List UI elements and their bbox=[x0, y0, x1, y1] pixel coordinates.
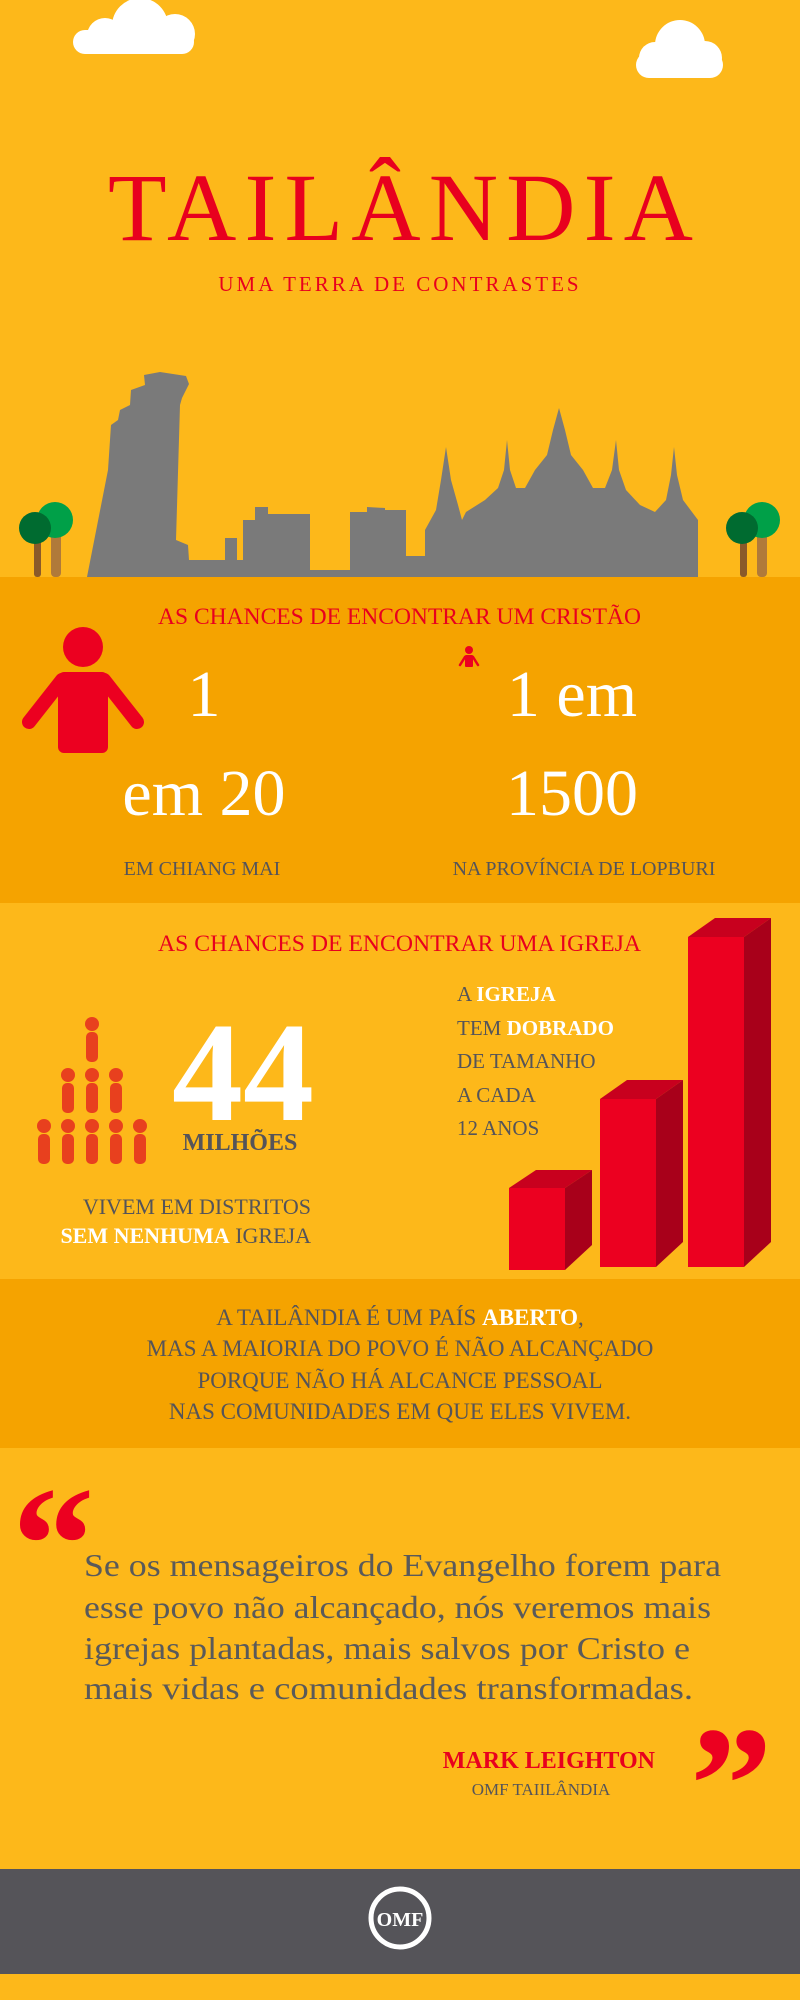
stat: 1 em 1500: 1 em bbox=[507, 658, 637, 731]
footer bbox=[0, 1869, 800, 1974]
trees right bbox=[726, 502, 780, 577]
text: church doubled: TEM DOBRADO bbox=[457, 1016, 614, 1040]
icon: big person bbox=[29, 627, 137, 753]
author: MARK LEIGHTON bbox=[443, 1748, 656, 1774]
icon: open quote: “ bbox=[12, 1453, 94, 1636]
icon: close quote: ” bbox=[690, 1693, 772, 1876]
logo: OMF bbox=[371, 1889, 429, 1947]
icon: people pyramid bbox=[37, 1017, 147, 1164]
quote text: igrejas plantadas, mais salvos por Cristo e bbox=[84, 1630, 690, 1666]
logo: OMF: OMF bbox=[377, 1909, 423, 1931]
quote text: esse povo não alcançado, nós veremos mais bbox=[84, 1589, 711, 1625]
heading: christian: AS CHANCES DE ENCONTRAR UM CRISTÃO bbox=[158, 604, 641, 629]
stat: 44: 44 bbox=[172, 993, 314, 1151]
bar chart: growth bbox=[509, 918, 771, 1270]
stat: 1 em 1500 bbox=[506, 658, 638, 830]
icon: small person bbox=[460, 646, 478, 667]
label: milhões: MILHÕES bbox=[183, 1130, 297, 1156]
text: vivem em distritos bbox=[60, 1194, 311, 1248]
skyline bbox=[87, 372, 698, 577]
icon: cloud left bbox=[73, 0, 195, 54]
quote text: mais vidas e comunidades transformadas. bbox=[84, 1670, 693, 1706]
stat: 1 em 20: 1 bbox=[188, 658, 220, 731]
text: vivem em distritos: SEM NENHUMA IGREJA bbox=[60, 1223, 311, 1248]
stat: 1 em 20 bbox=[122, 658, 286, 830]
panel: church chances bbox=[0, 903, 800, 1279]
panel: quote bbox=[12, 1453, 772, 1876]
stat: 1 em 1500: 1500 bbox=[506, 757, 638, 830]
author org: OMF TAIILÂNDIA bbox=[472, 1780, 611, 1799]
heading: church: AS CHANCES DE ENCONTRAR UMA IGREJA bbox=[158, 931, 641, 956]
text: church doubled: DE TAMANHO bbox=[457, 1049, 596, 1073]
panel: open country statement: NAS COMUNIDADES EM QUE ELES VIVEM. bbox=[169, 1399, 631, 1424]
trees left bbox=[19, 502, 73, 577]
panel: open country statement: PORQUE NÃO HÁ ALCANCE PESSOAL bbox=[197, 1368, 603, 1393]
subtitle: UMA TERRA DE CONTRASTES bbox=[218, 272, 582, 296]
panel: open country statement: MAS A MAIORIA DO POVO É NÃO ALCANÇADO bbox=[147, 1336, 653, 1361]
text: vivem em distritos: VIVEM EM DISTRITOS bbox=[83, 1194, 311, 1219]
title: TAILÂNDIA bbox=[108, 154, 693, 261]
text: church doubled: A CADA bbox=[457, 1083, 537, 1107]
text: church doubled: 12 ANOS bbox=[457, 1116, 539, 1140]
text: church doubled bbox=[457, 982, 614, 1140]
panel: open country statement: A TAILÂNDIA É UM PAÍS ABERTO, bbox=[216, 1305, 584, 1330]
text: church doubled: A IGREJA bbox=[457, 982, 556, 1006]
quote text bbox=[84, 1547, 721, 1706]
label: lopburi: NA PROVÍNCIA DE LOPBURI bbox=[453, 857, 715, 880]
label: chiang mai: EM CHIANG MAI bbox=[124, 858, 280, 880]
icon: cloud right bbox=[636, 20, 723, 78]
panel: christian chances bbox=[0, 577, 800, 903]
stat: 1 em 20: em 20 bbox=[122, 757, 286, 830]
quote text: Se os mensageiros do Evangelho forem para bbox=[84, 1547, 721, 1583]
panel: open country statement bbox=[0, 1279, 800, 1448]
